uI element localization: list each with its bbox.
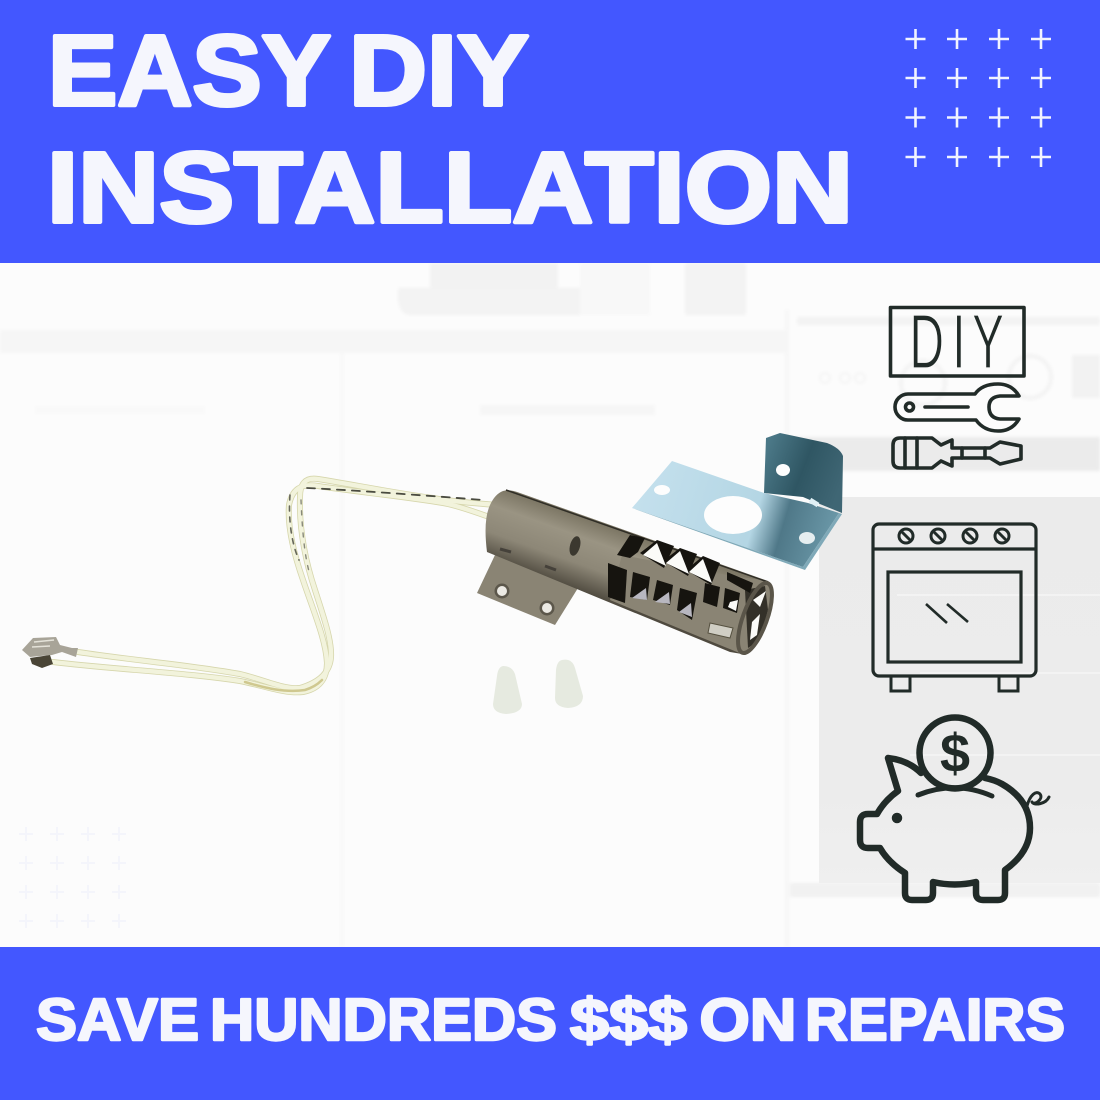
tail (1027, 793, 1049, 806)
footer headline: HUNDREDS (210, 987, 557, 1053)
cylindrical shell (486, 490, 773, 654)
title: DIY (349, 15, 529, 127)
icon: piggy bank (860, 718, 1049, 900)
footer headline: $$$ (570, 987, 687, 1053)
footer headline: REPAIRS (805, 987, 1065, 1053)
product: metal bracket (632, 433, 843, 570)
pig body (860, 758, 1030, 900)
footer headline (36, 987, 1065, 1053)
slot (568, 535, 582, 557)
wrench (895, 384, 1019, 431)
product: igniter wires (53, 479, 497, 692)
DIY frame (890, 308, 1024, 376)
icon: oven (873, 524, 1036, 691)
eye (894, 815, 900, 821)
title: EASY (48, 15, 331, 127)
plus-sign grid, header (906, 29, 1051, 167)
product: ceramic wire nuts (493, 660, 583, 714)
mesh windows (608, 535, 768, 648)
product: wire terminal (22, 637, 78, 668)
footer band (0, 947, 1100, 1100)
title (47, 15, 853, 244)
footer headline: SAVE (36, 987, 199, 1053)
product: igniter body (477, 490, 779, 657)
footer headline: ON (700, 987, 796, 1053)
coin (920, 718, 990, 788)
cylinder open end (731, 579, 779, 657)
coin slot (918, 788, 992, 796)
mounting tab (477, 555, 578, 625)
title: INSTALLATION (47, 132, 853, 244)
dollar sign: $ (940, 724, 970, 784)
screwdriver (893, 438, 1021, 468)
plus-sign grid, faint (19, 827, 126, 928)
background: faded kitchen photo (0, 263, 1100, 947)
DIY label: DIY (910, 298, 1004, 385)
icon: DIY tools (890, 298, 1024, 468)
header band (0, 0, 1100, 263)
